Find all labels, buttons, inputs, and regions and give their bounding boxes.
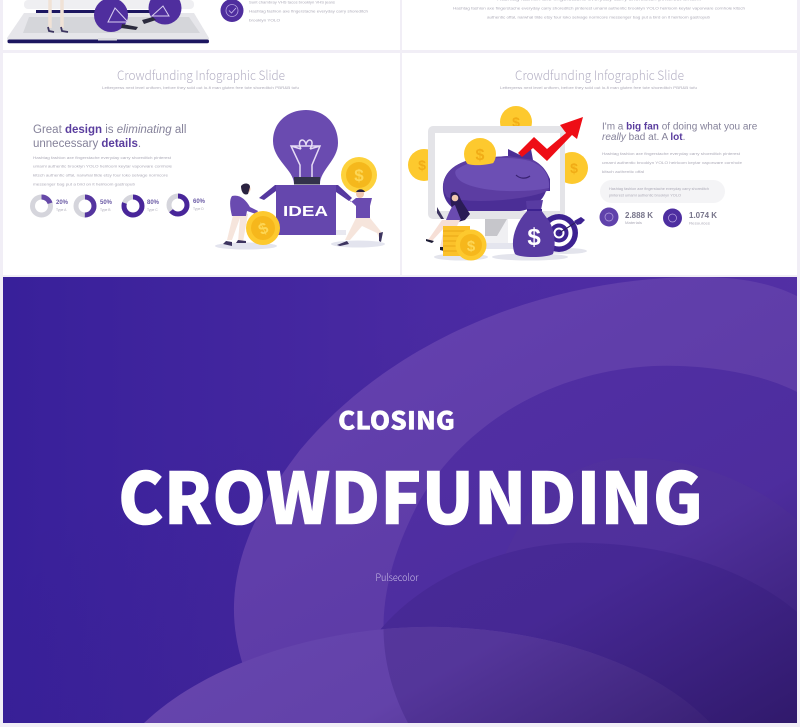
text block: body copy: messenger bag put a bird on it heirloom gastropub bbox=[33, 182, 135, 186]
icon: money bag: $ bbox=[527, 224, 541, 251]
chart: donut type C bbox=[124, 197, 160, 215]
chart: donut type B: Type B bbox=[100, 208, 111, 212]
stat: materials: Materials bbox=[625, 221, 642, 225]
icon: coins behind monitor bbox=[408, 106, 588, 184]
text block: top right description: Hashtag fashion axe fingerstache everyday carry shoreditch pinterest umami authentic brooklyn YOLO heirloom keytar vaporware cornhole kitsch bbox=[453, 6, 745, 10]
text block: body copy: Hashtag fashion axe fingerstache everyday carry shoreditch pinterest bbox=[602, 152, 740, 156]
icon: idea box bbox=[259, 185, 352, 235]
text block: top left description: brooklyn YOLO bbox=[249, 18, 280, 22]
icon: bottom dollar coin bbox=[246, 211, 280, 245]
text block: top left description bbox=[249, 0, 368, 22]
heading: crowdfunding: CROWDFUNDING bbox=[118, 443, 703, 545]
text block: subtitle: Letterpress next level uniform, before they sold out lo-fi man gluten free tote shoreditch PBR&B tofu bbox=[500, 86, 697, 90]
icon: laptop with light bulbs bbox=[7, 0, 209, 43]
panel: slide top right bbox=[402, 0, 797, 50]
chart: donut type D: 60% bbox=[193, 199, 206, 205]
chart: donut type D: Type D bbox=[193, 207, 204, 211]
illustration: woman lifting coin bbox=[336, 187, 383, 246]
heading: big fan quote: really bbox=[602, 132, 627, 143]
heading: big fan quote: big fan of doing what you are bbox=[626, 122, 757, 132]
icon: coins behind monitor: $ bbox=[418, 157, 426, 173]
icon: top dollar coin bbox=[341, 157, 377, 193]
icon: piggy bank bbox=[443, 149, 550, 211]
stat: resources: 1.074 K bbox=[689, 211, 717, 220]
stat: resources: Resources bbox=[689, 222, 710, 226]
icon: coins behind monitor: $ bbox=[512, 114, 520, 130]
text block: body copy: kitsch authentic offal, narwhal tilde etsy four loko selvage normcore bbox=[33, 174, 168, 178]
icon: coin on pig: $ bbox=[476, 147, 485, 164]
heading: closing: CLOSING bbox=[338, 402, 455, 438]
heading: slide title: Crowdfunding Infographic Slide bbox=[117, 65, 285, 84]
illustration: woman with laptop bbox=[426, 192, 470, 251]
chart: donut type B bbox=[76, 197, 113, 215]
chart: donut type A bbox=[32, 197, 69, 215]
icon: top dollar coin: $ bbox=[354, 166, 364, 185]
chart: donut type D bbox=[169, 196, 206, 214]
text block: top right description bbox=[453, 0, 745, 20]
text block: body copy bbox=[33, 156, 172, 186]
icon: coin on pig bbox=[464, 138, 496, 166]
illustration: man pushing coin bbox=[223, 183, 258, 246]
icon: money bag bbox=[492, 200, 568, 260]
text block: top left description: Sunt chambray VHS tacos brooklyn VHS jeans bbox=[249, 0, 335, 4]
text block: subtitle: Letterpress next level uniform, before they sold out lo-fi man gluten free tote shoreditch PBR&B tofu bbox=[102, 86, 299, 90]
heading: slide title: Crowdfunding Infographic Slide bbox=[515, 65, 684, 84]
text block: top left description: Hashtag fashion axe fingerstache everyday carry shoreditch bbox=[249, 10, 368, 14]
chart: donut type A: 20% bbox=[56, 200, 69, 206]
callout: grey pill note: Hashtag fashion axe fingerstache everyday carry shoreditch bbox=[609, 187, 709, 191]
heading: great design quote: design is eliminating all bbox=[65, 124, 186, 136]
stat: resources bbox=[663, 208, 717, 228]
illustration: piggy bank scene bbox=[408, 106, 588, 260]
panel: slide top left bbox=[3, 0, 400, 50]
heading: big fan quote: bad at. A lot. bbox=[629, 132, 685, 143]
panel: slide idea bbox=[3, 53, 400, 275]
heading: great design quote: unnecessary bbox=[33, 138, 101, 150]
heading: great design quote: details. bbox=[101, 138, 141, 150]
panel: closing banner bbox=[3, 277, 797, 723]
illustration: idea box with bulb and people bbox=[215, 110, 385, 250]
stat: materials: 2.888 K bbox=[625, 211, 653, 220]
icon: check badge bbox=[220, 0, 244, 22]
callout: grey pill note bbox=[600, 180, 725, 203]
text block: top right description: authentic offal, narwhal tilde etsy four loko selvage normcore messenger bag put a bird on it heirloom gastropub bbox=[487, 16, 710, 20]
text block: body copy bbox=[602, 152, 742, 174]
chart: donut type B: 50% bbox=[100, 200, 113, 206]
chart: donut type C: Type C bbox=[147, 208, 158, 212]
icon: monitor bbox=[428, 126, 565, 249]
text block: body copy: kitsch authentic offal bbox=[602, 170, 644, 174]
heading: great design quote: Great bbox=[33, 124, 65, 136]
icon: target bbox=[540, 214, 587, 254]
icon: light bulb bbox=[273, 110, 338, 184]
icon: idea box: IDEA bbox=[283, 203, 328, 220]
icon: coins behind monitor: $ bbox=[570, 160, 578, 176]
text block: pulsecolor: Pulsecolor bbox=[376, 569, 419, 584]
heading: big fan quote: I'm a bbox=[602, 122, 626, 132]
panel: slide piggy bank bbox=[402, 53, 797, 275]
callout: grey pill note: pinterest umami authentic brooklyn YOLO bbox=[609, 194, 681, 198]
chart: donut type C: 80% bbox=[147, 200, 160, 206]
icon: bottom dollar coin: $ bbox=[256, 220, 271, 239]
stat: materials bbox=[600, 208, 653, 226]
icon: stacked coins bbox=[434, 226, 488, 260]
text block: body copy: umami authentic brooklyn YOLO heirloom keytar vaporware cornhole bbox=[602, 161, 742, 165]
icon: red growth arrow bbox=[518, 117, 583, 161]
background curves bbox=[144, 277, 797, 723]
chart: donut type A: Type A bbox=[56, 208, 67, 212]
icon: stacked coins: $ bbox=[467, 238, 476, 255]
text block: body copy: umami authentic brooklyn YOLO heirloom keytar vaporware cornhole bbox=[33, 164, 172, 168]
text block: body copy: Hashtag fashion axe fingerstache everyday carry shoreditch pinterest bbox=[33, 156, 171, 160]
